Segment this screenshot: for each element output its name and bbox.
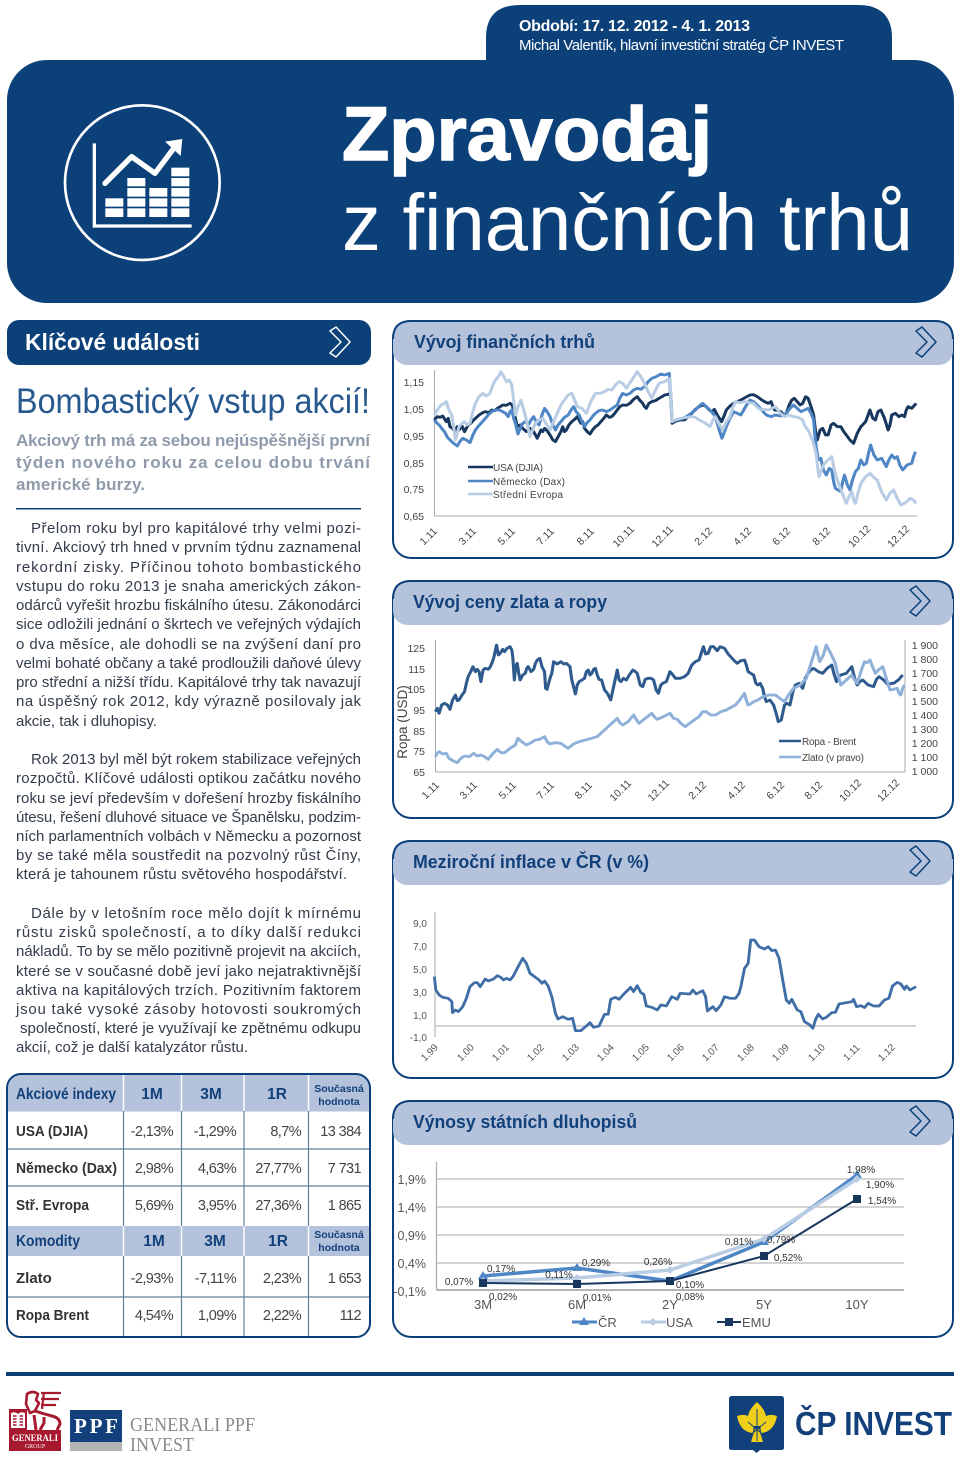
x axis labels: 1.10: [806, 1042, 828, 1064]
row: Střední Evropa: 5,69%: [135, 1198, 174, 1214]
x axis labels: 1.12: [876, 1042, 898, 1064]
panel heading: [393, 841, 953, 885]
table header: commodities: Komodity: [16, 1233, 80, 1250]
line chart: inflation: 7,0: [413, 942, 427, 953]
article paragraph 1: akcie, tak i dluhopisy.: [16, 713, 157, 730]
icon: rising chart in circle: [65, 105, 220, 260]
line chart: bond yields: 1,9%: [398, 1173, 426, 1187]
data labels: 1,90%: [866, 1180, 894, 1191]
table header: commodities: 1M: [143, 1233, 165, 1250]
logo text: Generali PPF Invest: INVEST: [130, 1434, 194, 1456]
x axis labels: 12.11: [645, 777, 672, 804]
x axis labels: 1.04: [595, 1042, 617, 1064]
line chart: oil and gold: 1 600: [912, 682, 938, 694]
row: Německo: 2,98%: [135, 1161, 174, 1177]
logo: PPF: PPF: [74, 1414, 118, 1438]
line chart: inflation: -1,0: [410, 1033, 427, 1044]
x axis labels: 4.12: [725, 779, 748, 802]
data labels: 1,98%: [847, 1165, 875, 1176]
data labels: 0,01%: [583, 1293, 611, 1304]
axis title: Ropa (USD): [395, 685, 410, 759]
line chart: oil and gold: [395, 640, 938, 804]
line chart: oil and gold: 115: [408, 664, 425, 676]
data labels: 0,02%: [489, 1292, 517, 1303]
x axis labels: 1.11: [420, 779, 442, 802]
x axis labels: 1.02: [525, 1042, 547, 1064]
heading: Klíčové události: Klíčové události: [25, 329, 200, 355]
article paragraph 1: odárců vyřešit hrozbu fiskálního útesu. Zákonodárci: [16, 597, 361, 614]
x axis labels: 1.11: [418, 525, 440, 548]
row: Zlato: 1 653: [328, 1271, 362, 1287]
line chart: oil and gold: 125: [407, 643, 425, 655]
row: Střední Evropa: 27,36%: [255, 1198, 302, 1214]
title: [342, 92, 913, 267]
x axis labels: 3.11: [457, 525, 479, 548]
data labels: 0,17%: [487, 1264, 515, 1275]
chart legend: EMU: [742, 1315, 771, 1330]
category labels: [474, 1297, 869, 1312]
line chart: oil and gold: 95: [413, 705, 425, 717]
article paragraph 1: tivní. Akciový trh hned v prvním týdnu zaznamenal: [16, 539, 361, 556]
table header: commodities: hodnota: [318, 1242, 360, 1254]
line chart: oil and gold: 85: [413, 726, 425, 738]
line chart: stock indexes: 0,75: [404, 484, 424, 496]
x axis labels: 8.12: [802, 779, 825, 802]
data labels: 1,54%: [868, 1196, 896, 1207]
row: Zlato: 2,23%: [263, 1271, 302, 1287]
data labels: 0,29%: [582, 1258, 610, 1269]
panel heading: Meziroční inflace v ČR (v %): [413, 851, 649, 872]
series: ČR: [478, 1170, 862, 1281]
chart legend: [779, 737, 864, 764]
category labels: 3M: [474, 1297, 492, 1312]
x axis labels: 1.00: [455, 1042, 477, 1064]
x axis labels: 12.12: [885, 523, 912, 550]
x axis labels: 12.12: [875, 777, 902, 804]
row: USA: -1,29%: [194, 1124, 237, 1140]
article paragraph 2: by se také měla soustředit na pozvolný růst Číny,: [16, 847, 361, 864]
line chart: inflation: 9,0: [413, 919, 427, 930]
logo text: Generali PPF Invest: [130, 1414, 255, 1456]
article paragraph 3: společností, které je využívají ke zpětnému odkupu: [20, 1020, 361, 1037]
line chart: stock indexes: 1,15: [404, 377, 424, 389]
x axis labels: 1.07: [700, 1042, 722, 1064]
article subheading: americké burzy.: [16, 475, 145, 494]
line chart: inflation: 3,0: [413, 988, 427, 999]
line chart: oil and gold: 65: [413, 767, 425, 779]
article paragraph 3: nákladů. To by se mělo pozitivně projevit na akciích,: [16, 943, 361, 960]
article paragraph 1: Přelom roku byl pro kapitálové trhy velmi pozi-: [31, 520, 361, 537]
table header: indexes: Akciové indexy: [16, 1086, 116, 1103]
x axis labels: 7.11: [535, 779, 557, 802]
row: Zlato: Zlato: [16, 1270, 52, 1287]
row: Německo: 7 731: [328, 1161, 362, 1177]
table header: indexes: 1R: [267, 1086, 287, 1103]
row: Střední Evropa: 1 865: [328, 1198, 362, 1214]
table header: commodities: 3M: [204, 1233, 226, 1250]
logo text: Generali PPF Invest: GENERALI PPF: [130, 1414, 255, 1436]
header tab: [486, 5, 892, 70]
table header: commodities: 1R: [268, 1233, 288, 1250]
data labels: 0,10%: [676, 1280, 704, 1291]
title: z finančních trhů: [342, 178, 913, 267]
logo: ČP shield: [729, 1396, 784, 1453]
row: Ropa Brent: Ropa Brent: [16, 1307, 89, 1324]
article paragraph 3: jsou také vysoké zásoby hotovosti soukromých: [15, 1001, 361, 1018]
article paragraph 2: která je tahounem růstu světového hospodářství.: [16, 866, 347, 883]
data labels: 0,07%: [445, 1277, 473, 1288]
line chart: oil and gold: 1 900: [912, 640, 938, 652]
article paragraph 2: Rok 2013 byl měl být rokem stabilizace veřejných: [31, 751, 361, 768]
panel: Meziroční inflace: [393, 841, 953, 1078]
table: indexes and commodities: [7, 1074, 370, 1337]
article paragraph 3: akcií, což je další katalyzátor růstu.: [16, 1039, 248, 1056]
line chart: oil and gold: 1 200: [912, 738, 938, 750]
data labels: [445, 1165, 896, 1304]
x axis labels: 6.12: [764, 779, 787, 802]
line chart: oil and gold: 75: [413, 746, 425, 758]
chart legend: [572, 1315, 771, 1330]
panel: Vývoj finančních trhů: [393, 321, 953, 558]
article paragraph 2: útesu, řešení dluhové situace ve Španělsku, podzim-: [16, 809, 361, 826]
row: Německo: 27,77%: [255, 1161, 302, 1177]
line chart: oil and gold: 1 300: [912, 724, 938, 736]
table header: indexes: hodnota: [318, 1096, 360, 1108]
line chart: bond yields: [393, 1162, 904, 1330]
line chart: oil and gold: 105: [407, 684, 425, 696]
row: Německo: [16, 1160, 362, 1177]
x axis labels: 1.09: [770, 1042, 792, 1064]
row: Zlato: -2,93%: [131, 1271, 174, 1287]
panel heading: [393, 321, 953, 365]
x axis labels: [419, 1042, 898, 1064]
chart legend: USA: [666, 1315, 693, 1330]
x axis labels: 4.12: [731, 525, 754, 548]
table header: indexes: Současná: [314, 1083, 364, 1095]
x axis labels: 6.12: [770, 525, 793, 548]
chart legend: Zlato (v pravo): [802, 753, 864, 764]
article paragraph 1: na úspěšný rok 2012, kdy výrazně posilovaly jak: [16, 693, 362, 710]
line chart: oil and gold: 1 000: [912, 766, 938, 778]
data labels: 0,26%: [644, 1257, 672, 1268]
heading: Klíčové události: [7, 320, 371, 365]
chart legend: USA (DJIA): [493, 463, 543, 474]
line chart: oil and gold: 1 800: [912, 654, 938, 666]
x axis labels: 7.11: [535, 525, 557, 548]
panel heading: Vývoj ceny zlata a ropy: [413, 592, 607, 612]
x axis labels: 1.99: [419, 1042, 441, 1064]
article paragraph 3: růstu zisků společností, a to díky další redukci: [16, 924, 361, 941]
table header: indexes: [16, 1083, 364, 1108]
line chart: oil and gold: 1 100: [912, 752, 938, 764]
x axis labels: [420, 777, 902, 804]
article paragraph 1: rekordní zisky. Příčinou tohoto bombastického: [16, 559, 361, 576]
article paragraph 1: [16, 520, 362, 730]
line chart: oil and gold: 1 700: [912, 668, 938, 680]
data labels: 0,08%: [676, 1292, 704, 1303]
row: Německo: 4,63%: [198, 1161, 237, 1177]
chart legend: Německo (Dax): [493, 477, 565, 488]
data labels: 0,81%: [725, 1237, 753, 1248]
panel heading: Vývoj finančních trhů: [414, 332, 595, 352]
category labels: 6M: [568, 1297, 586, 1312]
chart legend: [468, 463, 565, 501]
title: Zpravodaj: [342, 92, 712, 177]
x axis labels: 1.03: [560, 1042, 582, 1064]
row: Ropa Brent: 1,09%: [198, 1308, 237, 1324]
panel heading: [393, 581, 953, 625]
header tab: Období: 17. 12. 2012 - 4. 1. 2013: [519, 18, 750, 35]
x axis labels: 10.12: [846, 523, 873, 550]
series: EMU: [479, 1195, 861, 1288]
x axis labels: 10.11: [610, 523, 637, 550]
article subheading: Akciový trh má za sebou nejúspěšnější první: [16, 431, 371, 450]
row: Střední Evropa: Stř. Evropa: [16, 1197, 90, 1214]
x axis labels: 8.11: [573, 779, 595, 802]
data labels: 0,52%: [774, 1253, 802, 1264]
header tab: Michal Valentík, hlavní investiční stratég ČP INVEST: [519, 37, 844, 54]
series: USA: [479, 1175, 861, 1285]
panel heading: [393, 1101, 953, 1145]
chart legend: Ropa - Brent: [802, 737, 856, 748]
logo: PPF: [70, 1410, 122, 1451]
line chart: bond yields: 0,4%: [398, 1257, 426, 1271]
line chart: inflation: 1,0: [413, 1011, 427, 1022]
line chart: stock indexes: 0,85: [404, 458, 424, 470]
article paragraph 2: rozpočtů. Klíčové události optikou začátku nového: [16, 770, 361, 787]
line chart: inflation: 5,0: [413, 965, 427, 976]
article subheading: týden nového roku za celou dobu trvání: [16, 453, 371, 472]
row: Střední Evropa: 3,95%: [198, 1198, 237, 1214]
row: Ropa Brent: 2,22%: [263, 1308, 302, 1324]
row: USA: 8,7%: [270, 1124, 302, 1140]
article paragraph 3: aktiva na kapitálových trzích. Pozitivním faktorem: [16, 982, 361, 999]
row: USA: -2,13%: [131, 1124, 174, 1140]
table header: indexes: 1M: [141, 1086, 163, 1103]
article subheading: [16, 431, 371, 494]
x axis labels: 1.01: [490, 1042, 512, 1064]
line chart: stock indexes: [404, 370, 917, 550]
x axis labels: 1.08: [735, 1042, 757, 1064]
table header: indexes: 3M: [200, 1086, 222, 1103]
row: Ropa Brent: 4,54%: [135, 1308, 174, 1324]
logo: Generali: GROUP: [25, 1444, 46, 1450]
header banner: [7, 5, 954, 303]
chart legend: Střední Evropa: [493, 490, 563, 501]
x axis labels: 5.11: [497, 779, 519, 802]
x axis labels: 1.06: [665, 1042, 687, 1064]
x axis labels: 5.11: [496, 525, 518, 548]
category labels: 5Y: [756, 1297, 772, 1312]
data labels: 0,79%: [767, 1235, 795, 1246]
article paragraph 3: Dále by v letošním roce mělo dojít k mírnému: [31, 905, 361, 922]
line chart: oil and gold: 1 500: [912, 696, 938, 708]
line chart: stock indexes: 0,95: [404, 431, 424, 443]
x axis labels: 1.11: [842, 1042, 863, 1064]
x axis labels: 10.12: [837, 777, 864, 804]
row: USA: 13 384: [320, 1124, 362, 1140]
data labels: 0,11%: [545, 1270, 573, 1281]
category labels: 2Y: [662, 1297, 678, 1312]
article paragraph 1: o dva měsíce, ale dohodli se na zvýšení daní pro: [16, 636, 361, 653]
row: Německo: Německo (Dax): [16, 1160, 117, 1177]
line chart: stock indexes: 0,65: [404, 511, 424, 523]
article paragraph 3: [15, 905, 362, 1056]
line chart: inflation: [410, 912, 916, 1064]
category labels: 10Y: [845, 1297, 869, 1312]
header background: [7, 60, 954, 303]
line chart: bond yields: 0,9%: [398, 1229, 426, 1243]
logo: Generali: [9, 1392, 61, 1451]
panel: Výnosy státních dluhopisů: [393, 1101, 953, 1337]
x axis labels: 1.05: [630, 1042, 652, 1064]
table header: commodities: Současná: [314, 1229, 364, 1241]
x axis labels: 12.11: [649, 523, 676, 550]
x axis labels: [418, 523, 912, 550]
chart legend: ČR: [598, 1315, 617, 1330]
logo: Generali: GENERALI: [12, 1433, 58, 1443]
line chart: bond yields: -0,1%: [393, 1285, 426, 1299]
row: Zlato: -7,11%: [195, 1271, 237, 1287]
table header: commodities: [16, 1229, 364, 1254]
row: USA: [16, 1123, 362, 1140]
row: Ropa Brent: 112: [340, 1308, 362, 1324]
article headline: Bombastický vstup akcií!: [16, 382, 370, 421]
panel: Vývoj ceny zlata a ropy: [393, 581, 953, 818]
row: Ropa Brent: [16, 1307, 362, 1324]
row: Střední Evropa: [16, 1197, 362, 1214]
row: Zlato: [16, 1270, 362, 1287]
x axis labels: 10.11: [607, 777, 634, 804]
x axis labels: 2.12: [692, 525, 715, 548]
panel heading: Výnosy státních dluhopisů: [413, 1112, 637, 1132]
article paragraph 1: pro střední a nižší třídu. Kapitálové trhy tak navazují: [16, 674, 362, 691]
row: USA: USA (DJIA): [16, 1123, 88, 1140]
x axis labels: 8.11: [575, 525, 597, 548]
line chart: bond yields: 1,4%: [398, 1201, 426, 1215]
x axis labels: 8.12: [810, 525, 833, 548]
article paragraph 2: ních parlamentních volbách v Německu a pozornost: [16, 828, 362, 845]
article paragraph 1: vstupu do roku 2013 je snaha amerických zákon-: [16, 578, 361, 595]
article paragraph 2: roku se jeví především v dořešení hrozby fiskálního: [16, 790, 361, 807]
line chart: stock indexes: 1,05: [404, 404, 424, 416]
article paragraph 1: velmi bohaté občany a také prodloužili daňové úlevy: [16, 655, 362, 672]
article paragraph 3: které se v současné době jeví jako nejatraktivnější: [16, 963, 362, 980]
article paragraph 2: [16, 751, 362, 883]
x axis labels: 2.12: [686, 779, 709, 802]
line chart: oil and gold: 1 400: [912, 710, 938, 722]
article paragraph 1: sice odložili jednání o škrtech ve veřejných výdajích: [16, 616, 361, 633]
x axis labels: 3.11: [458, 779, 480, 802]
